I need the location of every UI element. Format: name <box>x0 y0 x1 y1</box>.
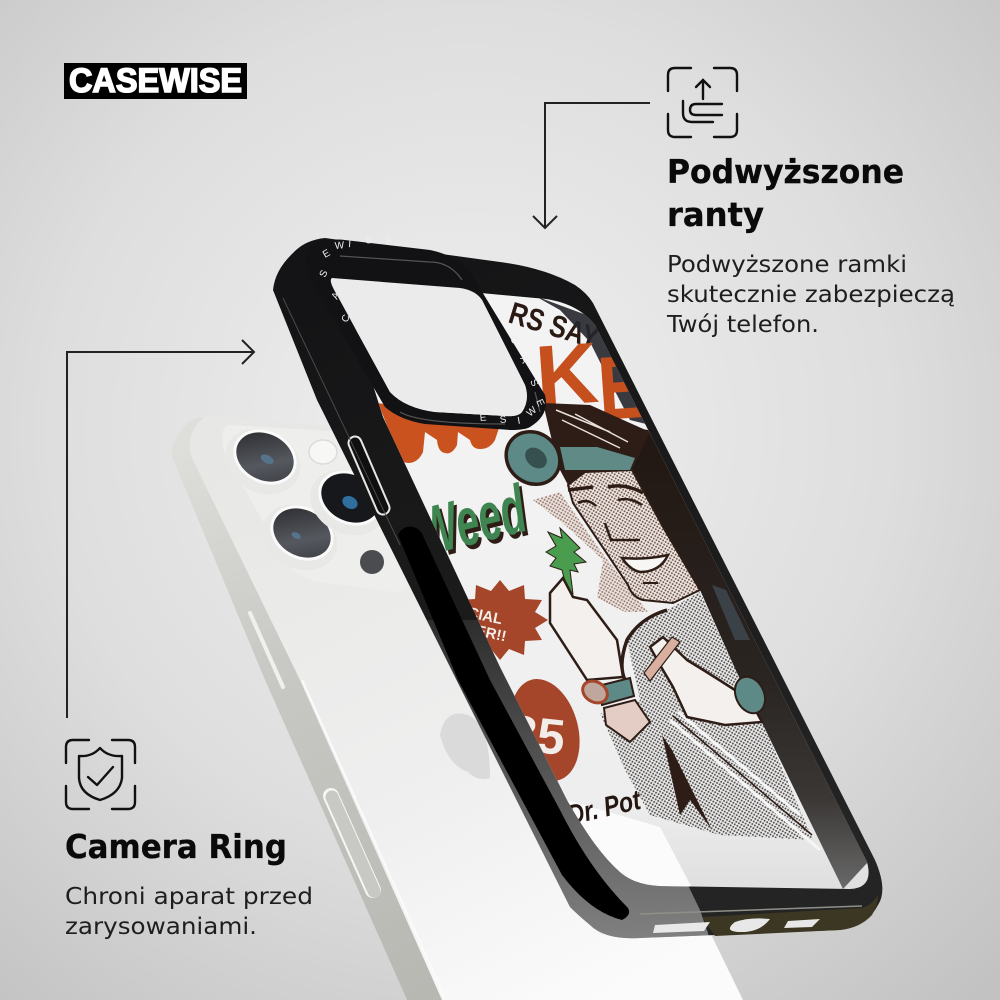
heading: raised edges: Podwyższone <box>667 152 904 191</box>
art shirt <box>600 592 813 840</box>
clear case <box>273 238 882 945</box>
heading: raised edges <box>667 152 904 234</box>
art starburst <box>468 580 548 660</box>
art text: top line: RS SAY <box>505 295 603 356</box>
art starburst text second line: ER!! <box>474 622 508 645</box>
text: raised edges description: Podwyższone ramki <box>667 250 907 278</box>
logo box <box>64 63 247 99</box>
logo <box>64 62 247 100</box>
art nose <box>605 523 640 540</box>
art orange strip on edge <box>650 432 727 566</box>
art hand right <box>650 637 762 725</box>
art signature: Dr. Pot <box>564 784 645 831</box>
lower button face <box>332 797 374 891</box>
art mouth <box>622 555 668 572</box>
art cuff <box>604 700 650 742</box>
port slot left <box>653 922 710 933</box>
icon: shield <box>66 740 135 809</box>
frame highlight <box>283 298 400 545</box>
arrow: top <box>533 103 650 228</box>
volume button <box>250 613 283 687</box>
bright lip line <box>640 906 862 914</box>
port slot right <box>784 919 820 928</box>
phone body <box>172 416 743 1000</box>
art letter E: E <box>594 337 651 440</box>
flash <box>309 440 337 464</box>
lens bottom <box>251 492 349 583</box>
ring lettering left: CASEWISE <box>318 235 394 324</box>
lens top <box>214 416 312 507</box>
art watch <box>579 677 634 707</box>
art tie <box>662 735 712 830</box>
text: raised edges description: skutecznie zabezpieczą <box>667 280 955 308</box>
camera plateau <box>222 425 410 592</box>
phone edge seen through glass <box>567 800 692 888</box>
dark translucent top frame <box>535 296 650 425</box>
art face <box>568 470 700 603</box>
art starburst text: CIAL <box>466 604 504 628</box>
art price ellipse <box>514 679 580 780</box>
art eyes <box>578 499 642 506</box>
side highlight line <box>302 680 446 1000</box>
heading: camera ring: Camera Ring <box>65 827 287 866</box>
sensor <box>360 550 384 574</box>
side button <box>355 443 383 508</box>
art letter K: K <box>533 325 601 425</box>
art Weed shadow: Weed <box>413 474 537 575</box>
text: raised edges description <box>666 250 955 338</box>
icon: raised edges <box>668 68 737 137</box>
lens right <box>299 457 397 548</box>
art Weed lettering: Weed <box>410 470 534 571</box>
arrow: left <box>67 340 254 718</box>
art head hair <box>543 403 650 485</box>
ring lettering right: CASEWISE <box>479 335 546 427</box>
camera ring <box>306 235 546 430</box>
phone side edge <box>172 417 442 1000</box>
text: camera ring description: Chroni aparat przed <box>65 882 313 910</box>
art collar line <box>622 610 667 680</box>
white phone <box>172 416 743 1000</box>
art joint <box>644 637 680 681</box>
text: camera ring description <box>65 882 313 940</box>
ring body <box>306 240 546 430</box>
printed artwork <box>378 295 868 889</box>
inner slot in band <box>398 527 629 920</box>
logo wordmark: CASEWISE <box>69 62 242 100</box>
art hand left <box>550 578 623 680</box>
art dark long hair along right edge <box>617 425 868 889</box>
ring highlights <box>340 256 540 424</box>
text: camera ring description: zarysowaniami. <box>65 912 257 940</box>
olive bottom lip <box>702 895 878 936</box>
art lapel dark line <box>673 716 812 835</box>
lower button <box>331 796 373 890</box>
art right cuff <box>729 672 771 718</box>
case frame <box>273 238 882 938</box>
heading: raised edges: ranty <box>667 195 764 234</box>
text: raised edges description: Twój telefon. <box>666 310 819 338</box>
art dripping orange letters <box>378 403 500 463</box>
port slot centre <box>730 918 770 932</box>
art pink burst <box>533 492 648 612</box>
art chin line <box>643 582 658 584</box>
art teal hair accent <box>712 585 750 640</box>
art green leaf <box>546 528 586 594</box>
art eyebrows <box>568 486 643 493</box>
apple logo <box>440 714 490 779</box>
art lapel lines <box>670 712 820 850</box>
art hair highlights <box>556 410 628 448</box>
art price number: 35 <box>507 704 568 766</box>
case glass back <box>340 280 869 889</box>
lower frame lightening <box>427 620 708 938</box>
ring window <box>331 278 527 416</box>
art head mirror <box>504 430 635 486</box>
